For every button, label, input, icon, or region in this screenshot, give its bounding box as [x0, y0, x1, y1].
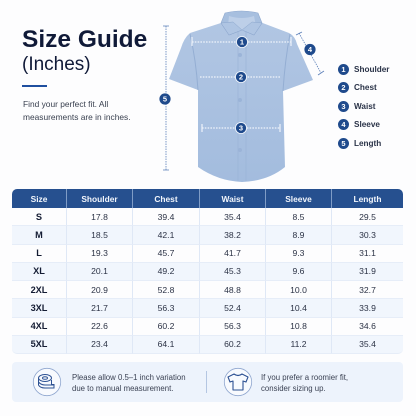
legend item: shoulder — [338, 64, 390, 75]
legend item: sleeve: Sleeve — [354, 120, 380, 129]
size table: 32.7 — [359, 285, 376, 295]
note: sizing up: consider sizing up. — [261, 384, 326, 393]
legend item: chest: 2 — [341, 83, 346, 92]
legend item: waist: 3 — [341, 102, 346, 110]
size table: 9.6 — [293, 266, 304, 276]
size table: 29.5 — [359, 212, 376, 222]
legend item: sleeve: 4 — [341, 120, 346, 129]
size table: 60.2 — [158, 321, 174, 331]
size table: 3XL — [31, 303, 47, 313]
size table: 22.6 — [91, 321, 108, 331]
size table: 41.7 — [224, 248, 241, 258]
shirt diagram: 5 — [163, 95, 167, 104]
size table: 10.4 — [290, 303, 307, 313]
size table: 18.5 — [91, 230, 108, 240]
size table: 64.1 — [158, 339, 174, 349]
size table: 2XL — [31, 285, 47, 295]
legend item: length — [338, 138, 381, 149]
size table: 21.7 — [91, 303, 108, 313]
size table: 30.3 — [359, 230, 376, 240]
legend item: chest — [338, 82, 377, 93]
size table: XL — [33, 266, 45, 276]
measurement lines — [192, 37, 291, 132]
intro text: Find your perfect fit. All — [23, 99, 108, 109]
size table: 39.4 — [158, 212, 174, 222]
size table: 35.4 — [224, 212, 241, 222]
legend item: shoulder: Shoulder — [354, 64, 389, 74]
title: Size Guide — [22, 26, 147, 53]
note: sizing up: If you prefer a roomier fit, — [261, 372, 348, 382]
intro text — [23, 99, 131, 122]
divider — [206, 371, 207, 393]
size table: 5XL — [31, 339, 47, 349]
size table: 23.4 — [91, 339, 108, 349]
legend item: length: Length — [354, 138, 381, 148]
footer panel — [12, 362, 403, 402]
size table: M — [35, 230, 43, 240]
size table: Size — [31, 194, 47, 204]
size table: 60.2 — [224, 339, 241, 349]
size table: 9.3 — [293, 248, 304, 258]
size table: 33.9 — [359, 303, 376, 313]
size table: 35.4 — [359, 339, 376, 349]
size table: 48.8 — [224, 285, 241, 295]
size table: 11.2 — [290, 339, 307, 349]
size table: 49.2 — [158, 266, 174, 276]
legend item: waist: Waist — [354, 102, 376, 110]
note: variation: Please allow 0.5–1 inch variation — [72, 372, 186, 382]
subtitle: (Inches) — [22, 54, 91, 75]
size table: 20.1 — [91, 266, 108, 276]
shirt diagram: 3 — [239, 124, 243, 133]
length and sleeve lines — [163, 26, 324, 170]
size table: 10.0 — [290, 285, 307, 295]
size table: 20.9 — [91, 285, 108, 295]
numbered markers — [159, 36, 316, 134]
size table: 52.4 — [224, 303, 241, 313]
legend item: waist — [338, 101, 376, 112]
size table — [12, 189, 403, 354]
shirt — [169, 11, 313, 182]
size table: 19.3 — [91, 248, 108, 258]
note: variation: due to manual measurement. — [72, 384, 173, 393]
shirt diagram: 4 — [308, 45, 313, 54]
size table: 8.9 — [293, 230, 304, 240]
size table: 8.5 — [293, 212, 304, 222]
note: variation — [72, 372, 186, 393]
shirt diagram: 1 — [240, 38, 244, 47]
note: sizing up — [261, 372, 348, 393]
size table: 34.6 — [359, 321, 376, 331]
size table: 42.1 — [158, 230, 174, 240]
size table: Sleeve — [285, 194, 312, 204]
intro text: measurements are in inches. — [23, 112, 131, 122]
size table: 31.1 — [359, 248, 376, 258]
size table: Chest — [154, 194, 178, 204]
size table: 31.9 — [359, 266, 376, 276]
shirt diagram — [159, 10, 324, 182]
size table: 45.7 — [158, 248, 174, 258]
size table: 56.3 — [224, 321, 241, 331]
legend item: sleeve — [338, 119, 380, 130]
size table: 45.3 — [224, 266, 241, 276]
shirt diagram: 2 — [239, 73, 243, 82]
legend item: chest: Chest — [354, 83, 377, 92]
size table: 52.8 — [158, 285, 174, 295]
accent rule — [22, 85, 47, 87]
size table: 4XL — [31, 321, 47, 331]
size table: Waist — [221, 194, 244, 204]
size table: Length — [354, 194, 381, 204]
size table: S — [36, 212, 42, 222]
size table: 56.3 — [158, 303, 174, 313]
legend item: length: 5 — [341, 138, 346, 148]
size table: 17.8 — [91, 212, 108, 222]
icon: measuring tape — [32, 368, 62, 396]
size table: L — [36, 248, 42, 258]
legend — [338, 64, 390, 149]
icon: t-shirt — [224, 368, 252, 396]
legend item: shoulder: 1 — [341, 64, 346, 74]
size table: 38.2 — [224, 230, 241, 240]
size table: Shoulder — [81, 194, 118, 204]
size table: 10.8 — [290, 321, 307, 331]
